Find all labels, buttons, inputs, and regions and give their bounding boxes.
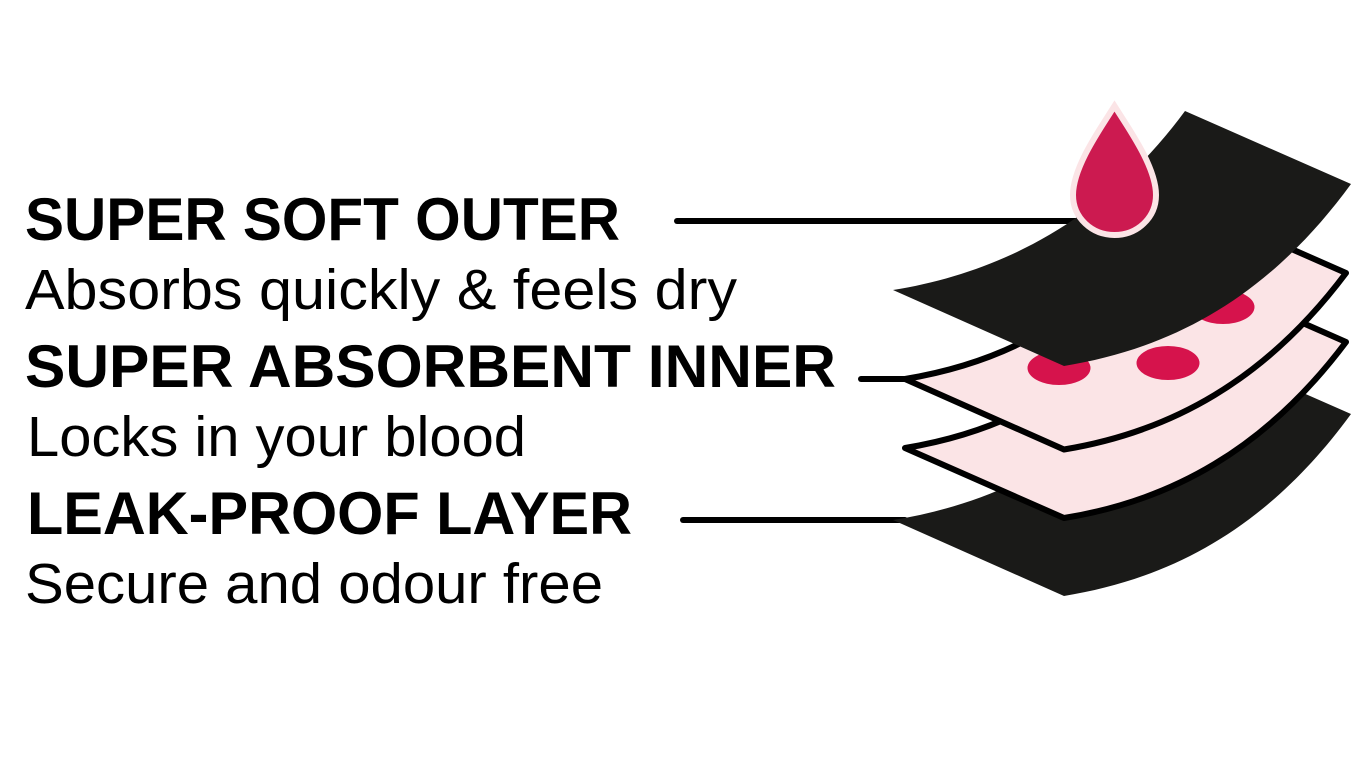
leader line: outer	[677, 218, 1080, 224]
layer: upper pink absorbent sheet	[905, 200, 1346, 450]
heading: super soft outer: SUPER SOFT OUTER	[25, 186, 620, 253]
layer: black super soft outer	[893, 111, 1351, 366]
heading: super absorbent inner: SUPER ABSORBENT INNER	[25, 333, 836, 400]
leader line: inner	[861, 376, 907, 382]
layer: lower pink absorbent sheet	[905, 269, 1346, 518]
leader line: leak-proof	[683, 517, 905, 523]
absorbed blood spots	[1028, 290, 1254, 385]
heading: leak-proof layer: LEAK-PROOF LAYER	[27, 480, 632, 547]
text: absorbs quickly: Absorbs quickly & feels dry	[25, 258, 738, 322]
text: secure and odour free: Secure and odour free	[25, 552, 603, 616]
layer: black leak-proof base	[893, 341, 1351, 596]
icon: blood drop	[1073, 106, 1156, 235]
text: locks in your blood: Locks in your blood	[27, 405, 526, 469]
